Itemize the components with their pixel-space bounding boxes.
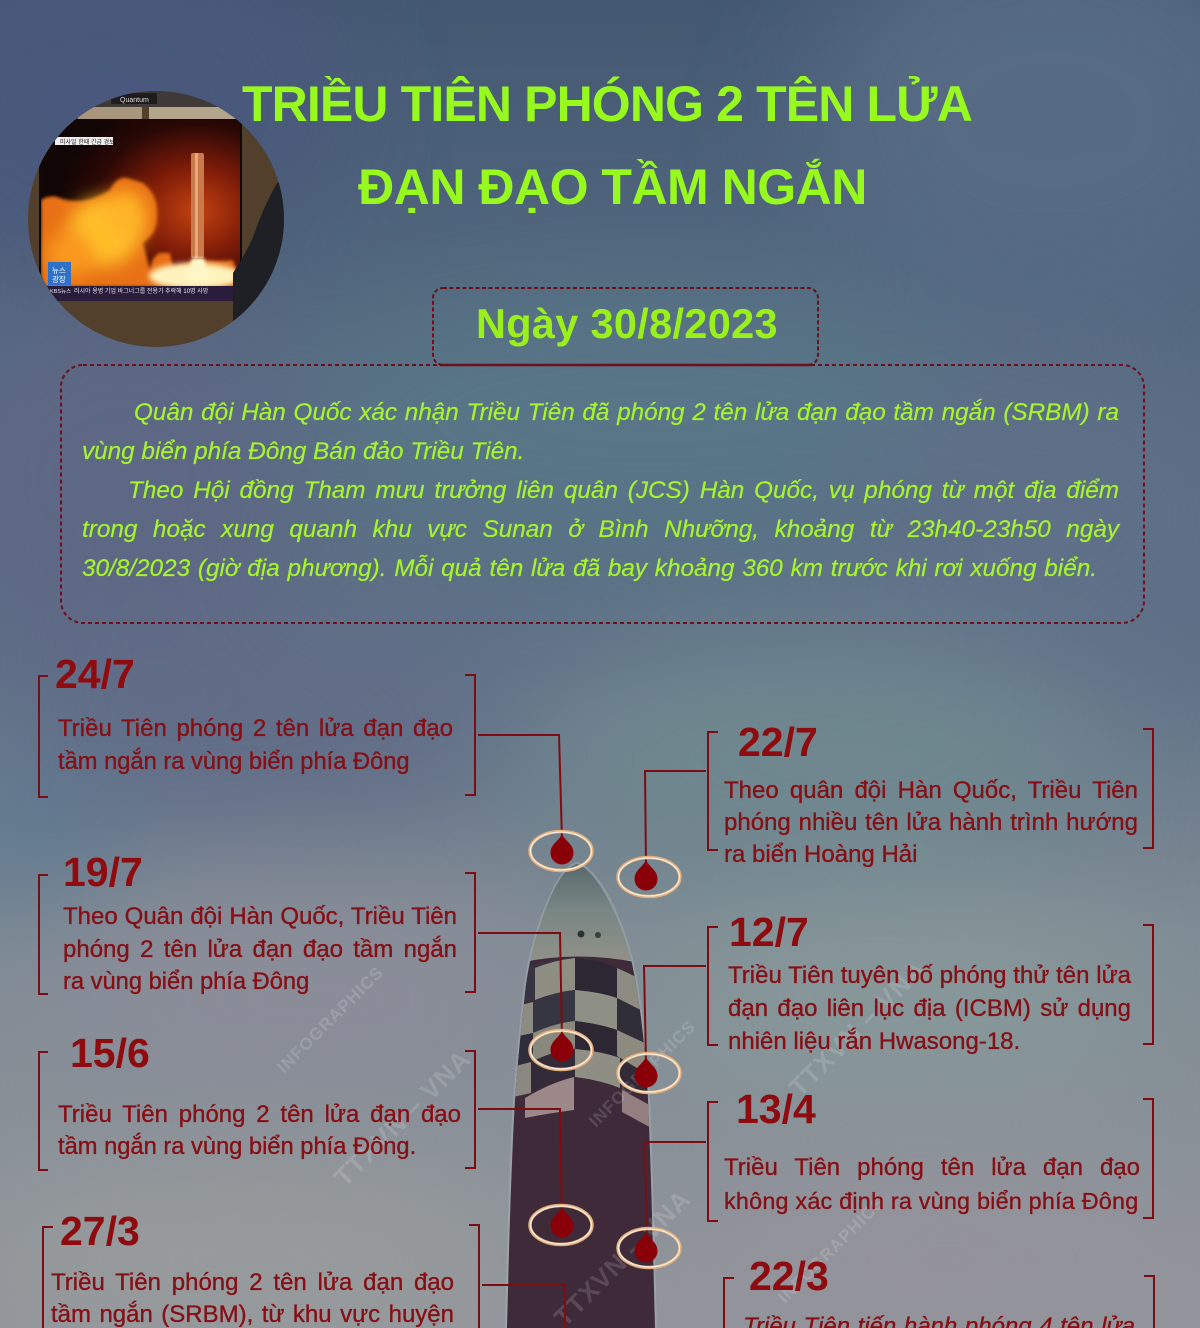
summary text: 30/8/2023 (giờ địa phương). Mỗi quả tên lửa đã bay khoảng 360 km trước khi rơi xuống biển. xyxy=(82,555,1097,582)
event 24/7: tầm ngắn ra vùng biển phía Đông xyxy=(58,749,410,775)
watermarks: INFOGRAPHICS xyxy=(273,963,387,1077)
event 19/7: 19/7 xyxy=(63,849,143,895)
event 22/7: 22/7 xyxy=(738,719,818,765)
event 27/3 xyxy=(51,1209,454,1328)
event 27/3: tầm ngắn (SRBM), từ khu vực huyện xyxy=(51,1301,454,1328)
event 22/7: ra biển Hoàng Hải xyxy=(724,841,917,868)
event 15/6: tầm ngắn ra vùng biển phía Đông. xyxy=(58,1134,416,1160)
summary text: trong hoặc xung quanh khu vực Sunan ở Bình Nhưỡng, khoảng từ 23h40-23h50 ngày xyxy=(82,516,1119,543)
date heading: Ngày 30/8/2023 xyxy=(476,300,778,347)
event 19/7: Theo Quân đội Hàn Quốc, Triều Tiên xyxy=(63,903,457,930)
photo: missile launch on TV screen: Quantum xyxy=(120,97,149,104)
event 22/3 xyxy=(743,1254,1135,1328)
event 24/7: Triều Tiên phóng 2 tên lửa đạn đạo xyxy=(58,715,453,742)
photo: missile launch on TV screen: 미사일 한때 긴급 경보 xyxy=(60,138,115,146)
event 19/7: ra vùng biển phía Đông xyxy=(63,969,309,995)
summary text: Theo Hội đồng Tham mưu trưởng liên quân (JCS) Hàn Quốc, vụ phóng từ một địa điểm xyxy=(128,477,1119,504)
watermarks: INFOGRAPHICS xyxy=(774,1193,888,1307)
event 13/4: 13/4 xyxy=(736,1086,816,1132)
watermarks: TTXVN – VNA xyxy=(783,954,932,1102)
summary text: Quân đội Hàn Quốc xác nhận Triều Tiên đã phóng 2 tên lửa đạn đạo tầm ngắn (SRBM) ra xyxy=(134,399,1119,426)
event 12/7: Triều Tiên tuyên bố phóng thử tên lửa xyxy=(728,962,1131,989)
title xyxy=(242,76,972,215)
event 19/7 xyxy=(63,849,457,995)
event 22/3: 22/3 xyxy=(749,1254,829,1299)
summary text: vùng biển phía Đông Bán đảo Triều Tiên. xyxy=(82,438,524,465)
event 12/7 xyxy=(728,909,1132,1055)
watermarks: TTXVN – VNA xyxy=(548,1184,697,1328)
title: ĐẠN ĐẠO TẦM NGẮN xyxy=(358,159,867,215)
watermarks: TTXVN – VNA xyxy=(328,1044,477,1192)
photo: missile launch on TV screen: KBS뉴스 xyxy=(50,288,71,295)
photo: missile launch on TV screen xyxy=(28,91,284,347)
rocket xyxy=(505,862,657,1328)
watermarks: INFOGRAPHICS xyxy=(585,1017,699,1131)
event 13/4 xyxy=(724,1086,1140,1214)
date and summary frames xyxy=(60,287,1145,624)
event 24/7 xyxy=(55,651,453,775)
summary text xyxy=(82,398,1120,582)
event 24/7: 24/7 xyxy=(55,651,135,697)
event 15/6: Triều Tiên phóng 2 tên lửa đạn đạo xyxy=(58,1101,461,1128)
event 22/7 xyxy=(724,719,1138,868)
event 13/4: Triều Tiên phóng tên lửa đạn đạo xyxy=(724,1154,1140,1181)
event 22/7: Theo quân đội Hàn Quốc, Triều Tiên xyxy=(724,777,1138,804)
event 12/7: nhiên liệu rắn Hwasong-18. xyxy=(728,1028,1020,1055)
event 27/3: 27/3 xyxy=(60,1209,140,1254)
event 12/7: đạn đạo liên lục địa (ICBM) sử dụng xyxy=(728,995,1131,1022)
event 22/7: phóng nhiều tên lửa hành trình hướng xyxy=(724,809,1138,836)
event 15/6: 15/6 xyxy=(70,1030,150,1076)
event 12/7: 12/7 xyxy=(729,909,809,955)
photo: missile launch on TV screen: 러시아 용병 기업 바그너그룹 전용기 추락해 10명 사망 xyxy=(74,287,209,295)
photo: missile launch on TV screen: 광장 xyxy=(52,274,66,284)
event 13/4: không xác định ra vùng biển phía Đông xyxy=(724,1188,1138,1214)
event 15/6 xyxy=(58,1030,461,1160)
photo: missile launch on TV screen: 뉴스 xyxy=(52,266,66,275)
title: TRIỀU TIÊN PHÓNG 2 TÊN LỬA xyxy=(242,76,972,132)
event 27/3: Triều Tiên phóng 2 tên lửa đạn đạo xyxy=(51,1269,454,1296)
event 19/7: phóng 2 tên lửa đạn đạo tầm ngắn xyxy=(63,936,457,963)
